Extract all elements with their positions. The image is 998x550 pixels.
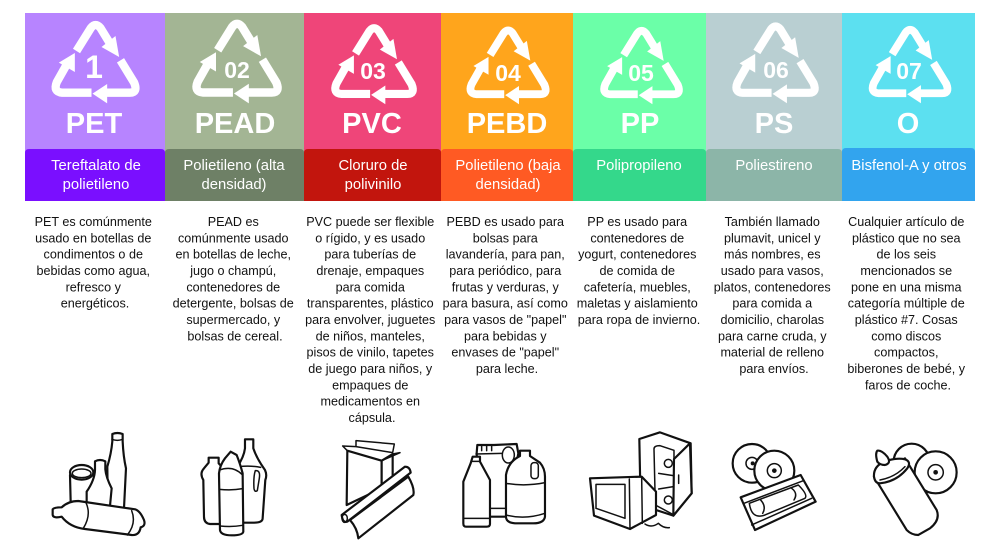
text block: PP: contenedores de — [590, 231, 684, 245]
text block: PS: para envíos. — [739, 362, 809, 376]
text block: PS: platos, contenedores — [714, 280, 831, 294]
text block: PVC: empaques de — [332, 378, 408, 392]
text block: PP: maletas y aislamiento — [577, 297, 698, 311]
acronym PP: PP — [621, 108, 659, 140]
text block: PET: usado en botellas de — [35, 231, 151, 245]
text block: PEBD: frutas y verduras, y — [452, 280, 559, 294]
subheader: Tereftalato de polietileno — [25, 149, 165, 201]
acronym PS: PS — [755, 108, 793, 140]
text block: PP: cafetería, muebles, — [584, 280, 691, 294]
subheader: Polipropileno: Polipropileno — [596, 158, 682, 174]
subheader: Polietileno (alta densidad): Polietileno (alta — [183, 158, 285, 174]
subheader: Poliestireno — [706, 149, 842, 201]
text block: O: como discos — [871, 329, 941, 343]
text block: PET: PET es comúnmente — [35, 215, 152, 229]
text block: PEAD: detergente, bolsas de — [173, 297, 294, 311]
panel: PVC — [304, 13, 441, 201]
text block: O: plástico que no sea — [852, 231, 961, 245]
subheader: Polietileno (baja densidad) — [441, 149, 573, 201]
text block: PEBD: para periódico, para — [449, 264, 561, 278]
text block: PEBD: para basura, así como — [443, 297, 568, 311]
text block: PET: bebidas como agua, — [37, 264, 150, 278]
icon: recycling triangle 05 — [604, 31, 679, 104]
text block: PVC: drenaje, empaques — [316, 264, 424, 278]
number 06: 06 — [763, 57, 789, 83]
subheader: Polietileno (alta densidad) — [165, 149, 304, 201]
text block: PEAD: en botellas de leche, — [175, 248, 291, 262]
text block: PVC: pisos de vinilo, tapetes — [307, 346, 434, 360]
text block: O: pone en una misma — [851, 280, 962, 294]
text block: O: mencionados se — [860, 264, 952, 278]
acronym PEAD: PEAD — [195, 108, 275, 140]
text block: PET: energéticos. — [61, 297, 129, 311]
text block: PVC: para comida — [336, 280, 405, 294]
subheader: Bisfenol-A y otros: Bisfenol-A y otros — [851, 158, 967, 174]
subheader: Tereftalato de polietileno: Tereftalato de — [51, 158, 141, 174]
text block: PEAD: supermercado, y — [186, 313, 281, 327]
text block: PVC: transparentes, plástico — [307, 297, 434, 311]
text block: PVC: cápsula. — [349, 411, 395, 425]
number 04: 04 — [495, 60, 521, 86]
subheader: Poliestireno: Poliestireno — [735, 158, 813, 174]
number 05: 05 — [628, 60, 654, 86]
text block: PEBD: lavandería, para pan, — [446, 248, 565, 262]
text block: PVC: medicamentos en — [321, 395, 420, 409]
subheader: Bisfenol-A y otros — [842, 148, 975, 201]
text block: PP: para ropa de invierno. — [578, 313, 700, 327]
text block: PEAD: jugo o champú, — [189, 264, 276, 278]
icon: PVC box and film roll — [342, 441, 414, 538]
text block: PVC: PVC puede ser flexible — [306, 215, 434, 229]
text block: PEBD: para vasos de "papel" — [444, 313, 566, 327]
text block: PVC: para tuberías de — [324, 248, 416, 262]
text block: PEAD: PEAD es — [208, 215, 259, 229]
text block: O: plástico #7. Cosas — [855, 313, 958, 327]
icon: PEAD bottles — [201, 439, 266, 535]
subheader: Polietileno (alta densidad): densidad) — [202, 177, 267, 193]
panel: PEAD — [165, 13, 304, 201]
text block: PEBD: bolsas para — [473, 231, 538, 245]
panel: PP — [573, 13, 706, 201]
icon: PET bottles — [53, 433, 145, 535]
subheader: Polipropileno — [573, 149, 706, 201]
text block: PP: de comida de — [599, 264, 675, 278]
text block: PS: También llamado — [725, 215, 820, 229]
text block: PEAD: contenedores de — [186, 280, 280, 294]
text block: PS: para carne cruda, y — [718, 329, 827, 343]
text block: PET: refresco y — [66, 280, 122, 294]
number 07: 07 — [896, 58, 922, 84]
icon: O discs and spray bottle — [874, 444, 957, 535]
number 03: 03 — [360, 58, 386, 84]
panel: O — [842, 13, 975, 201]
subheader: Cloruro de polivinilo: polivinilo — [345, 177, 401, 193]
icon: recycling triangle 02 — [197, 24, 278, 103]
text block: O: categoría múltiple de — [848, 297, 965, 311]
text block: PVC: para envolver, juguetes — [305, 313, 435, 327]
acronym O: O — [897, 108, 919, 140]
text block: PS: más nombres, es — [724, 248, 821, 262]
text block: PET: condimentos o de — [44, 248, 143, 262]
subheader: Cloruro de polivinilo — [304, 149, 441, 201]
text block: PS: para comida a — [732, 297, 812, 311]
text block: O: de los seis — [876, 248, 936, 262]
icon: PEBD containers — [463, 444, 545, 527]
text block: O: compactos, — [874, 346, 938, 360]
subheader: Polietileno (baja densidad): densidad) — [476, 177, 541, 193]
panel: PEBD — [441, 13, 573, 201]
text block: O: Cualquier artículo de — [848, 215, 964, 229]
text block: PVC: de niños, manteles, — [316, 329, 425, 343]
text block: PEBD: para bebidas y — [464, 329, 547, 343]
icon: recycling triangle 07 — [873, 30, 947, 103]
subheader: Polietileno (baja densidad): Polietileno (baja — [455, 158, 561, 174]
text block: O: faros de coche. — [865, 378, 951, 392]
acronym PEBD: PEBD — [467, 108, 547, 140]
number 02: 02 — [224, 57, 250, 83]
text block: PEBD: PEBD es usado para — [446, 215, 564, 229]
subheader: Cloruro de polivinilo: Cloruro de — [338, 158, 408, 174]
text block: PEAD: bolsas de cereal. — [187, 329, 283, 343]
icon: recycling triangle 1 — [56, 25, 135, 103]
icon: recycling triangle 03 — [335, 28, 413, 104]
number 1: 1 — [85, 49, 103, 85]
text block: PEBD: envases de "papel" — [451, 346, 559, 360]
text block: PEAD: comúnmente usado — [178, 231, 289, 245]
subheader: Tereftalato de polietileno: polietileno — [63, 177, 129, 193]
icon: recycling triangle 04 — [470, 30, 546, 104]
text block: PS: plumavit, unicel y — [724, 231, 821, 245]
acronym PET: PET — [66, 108, 122, 140]
text block: PVC: de juego para niños, y — [308, 362, 433, 376]
text block: PS: usado para vasos, — [721, 264, 824, 278]
icon: PP television and fridge — [590, 432, 692, 529]
text block: PVC: o rígido, y es usado — [315, 231, 425, 245]
icon: recycling triangle 06 — [736, 26, 815, 103]
text block: PS: material de relleno — [720, 346, 824, 360]
text block: PP: yogurt, contenedores — [578, 248, 696, 262]
text block: PP: PP es usado para — [587, 215, 687, 229]
text block: PEBD: para leche. — [476, 362, 538, 376]
acronym PVC: PVC — [342, 108, 402, 140]
panel: PET — [25, 13, 165, 201]
icon: PS discs and videotape — [733, 444, 816, 530]
panel: PS — [706, 13, 842, 201]
text block: O: biberones de bebé, y — [847, 362, 966, 376]
text block: PS: domicilio, charolas — [720, 313, 824, 327]
